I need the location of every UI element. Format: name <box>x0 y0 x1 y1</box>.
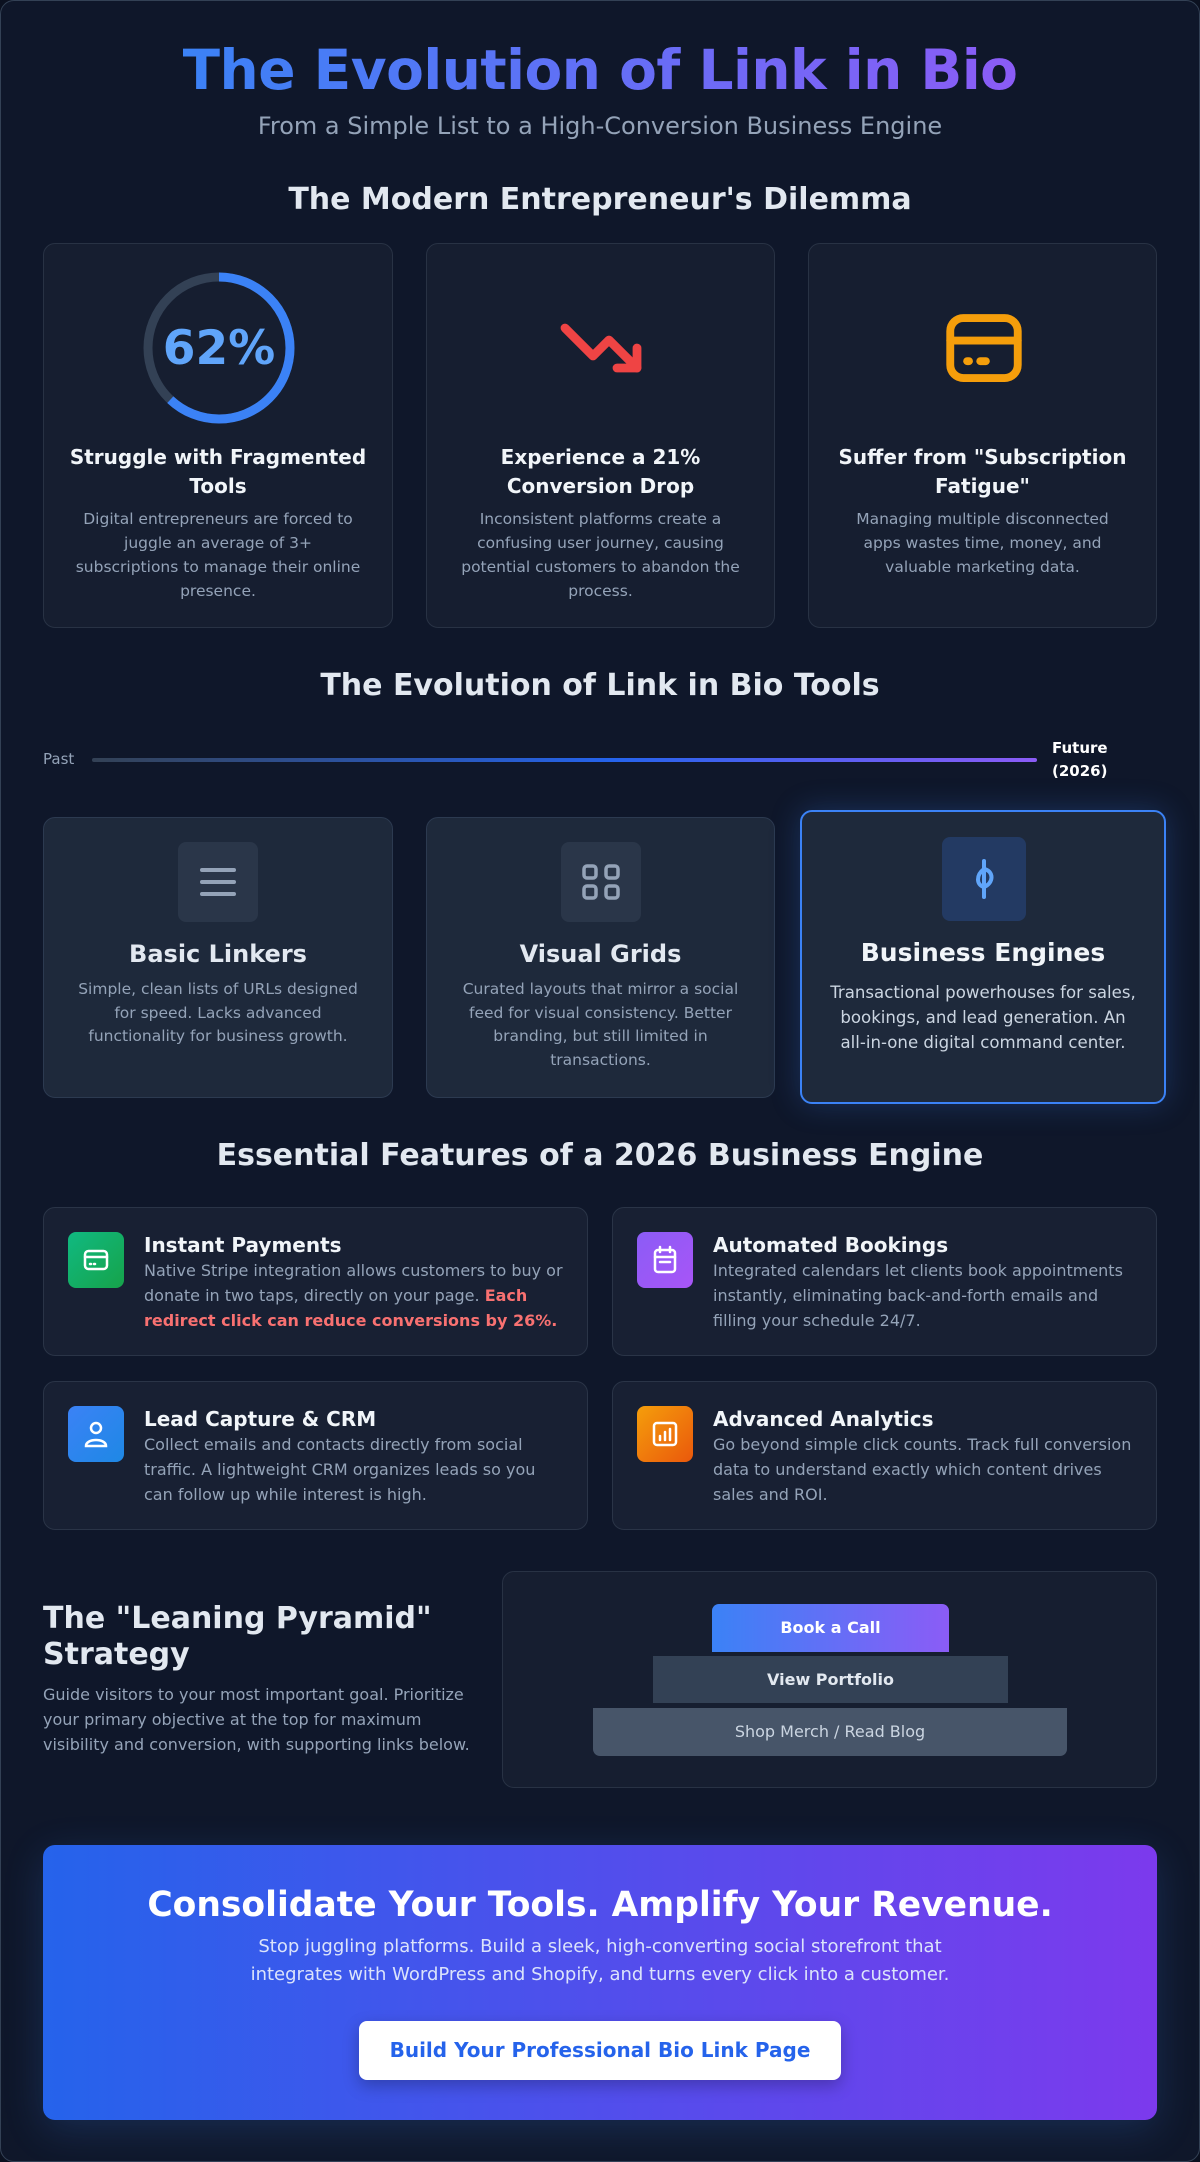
icon: business engine <box>942 837 1026 921</box>
timeline <box>43 739 1108 780</box>
text: description: Managing multiple disconnected apps wastes time, money, and valuable marketing data. <box>856 510 1109 576</box>
text: description: Curated layouts that mirror a social feed for visual consistency. Better branding, but still limited in transactions. <box>463 980 738 1068</box>
bar: view portfolio: View Portfolio <box>767 1670 894 1689</box>
chart: 62% ring: 62% <box>163 321 275 376</box>
button: Build Your Professional Bio Link Page <box>390 2038 810 2062</box>
chart: pyramid <box>502 1571 1157 1788</box>
text: description: Inconsistent platforms create a confusing user journey, causing potential customers to abandon the process. <box>461 510 740 600</box>
panel: automated bookings <box>612 1207 1157 1356</box>
label: future: Future <box>1052 739 1108 757</box>
subtitle: From a Simple List to a High-Conversion Business Engine <box>258 112 942 140</box>
text: pyramid description: Guide visitors to your most important goal. Prioritize your primary objective at the top for maximum visibility and conversion, with supporting links below. <box>43 1685 470 1754</box>
button <box>359 2021 841 2080</box>
text: title: Instant Payments <box>144 1233 342 1257</box>
text: description: Digital entrepreneurs are forced to juggle an average of 3+ subscriptions to manage their online presence. <box>76 510 360 600</box>
panel: fragmented tools <box>43 243 393 628</box>
panel: lead capture <box>43 1381 588 1530</box>
icon: user <box>68 1406 124 1462</box>
text: title: Struggle with Fragmented Tools <box>70 445 366 498</box>
bar: book a call <box>712 1604 949 1652</box>
heading: features: Essential Features of a 2026 Business Engine <box>217 1138 983 1173</box>
bar: shop merch <box>593 1708 1067 1756</box>
text: description: Native Stripe integration allows customers to buy or donate in two taps, directly on your page. Each redirect click can reduce conversions by 26%. <box>144 1261 563 1330</box>
icon: grid <box>561 842 641 922</box>
title: The Evolution of Link in Bio <box>183 38 1017 102</box>
bar: view portfolio <box>653 1656 1008 1703</box>
panel: visual grids <box>426 817 775 1098</box>
icon: trending down <box>560 324 642 372</box>
text: description: Transactional powerhouses for sales, bookings, and lead generation. An all-in-one digital command center. <box>830 983 1136 1052</box>
chart: 62% ring <box>144 272 294 424</box>
icon: calendar <box>637 1232 693 1288</box>
text: description: Simple, clean lists of URLs designed for speed. Lacks advanced functionality for business growth. <box>78 980 358 1045</box>
panel: instant payments <box>43 1207 588 1356</box>
panel: analytics <box>612 1381 1157 1530</box>
panel: conversion drop <box>426 243 775 628</box>
icon: credit card <box>946 314 1022 382</box>
icon: analytics <box>637 1406 693 1462</box>
text: description: Collect emails and contacts directly from social traffic. A lightweight CRM organizes leads so you can follow up while interest is high. <box>144 1435 535 1504</box>
icon: list <box>178 842 258 922</box>
text: title: Lead Capture & CRM <box>144 1407 376 1431</box>
bar: shop merch: Shop Merch / Read Blog <box>735 1722 925 1741</box>
heading: leaning pyramid: The "Leaning Pyramid" Strategy <box>43 1601 432 1672</box>
icon: payments <box>68 1232 124 1288</box>
panel: basic linkers <box>43 817 393 1098</box>
panel: subscription fatigue <box>808 243 1157 628</box>
text: title: Business Engines <box>861 938 1105 967</box>
bar: book a call: Book a Call <box>780 1618 881 1637</box>
text: title: Basic Linkers <box>129 940 307 968</box>
text: description: Go beyond simple click counts. Track full conversion data to understand exactly which content drives sales and ROI. <box>713 1435 1131 1504</box>
text: title: Suffer from "Subscription Fatigue" <box>839 445 1126 498</box>
text: title: Visual Grids <box>520 940 681 968</box>
label: future <box>1052 739 1108 780</box>
panel: business engines (highlighted) <box>800 810 1166 1104</box>
label: past: Past <box>43 750 74 768</box>
text: cta heading: Consolidate Your Tools. Amplify Your Revenue. <box>147 1885 1053 1925</box>
text: title: Advanced Analytics <box>713 1407 934 1431</box>
heading: evolution: The Evolution of Link in Bio Tools <box>320 668 880 703</box>
panel: call to action <box>43 1845 1157 2120</box>
label: future: (2026) <box>1052 762 1107 780</box>
text: description: Integrated calendars let clients book appointments instantly, eliminating back-and-forth emails and filling your schedule 24/7. <box>713 1261 1123 1330</box>
text: cta description: Stop juggling platforms. Build a sleek, high-converting social storefront that integrates with WordPress and Shopify, and turns every click into a customer. <box>251 1936 949 1985</box>
text: title: Automated Bookings <box>713 1233 948 1257</box>
text: title: Experience a 21% Conversion Drop <box>501 445 700 498</box>
heading: dilemma: The Modern Entrepreneur's Dilemma <box>288 182 912 217</box>
timeline bar <box>92 758 1037 762</box>
